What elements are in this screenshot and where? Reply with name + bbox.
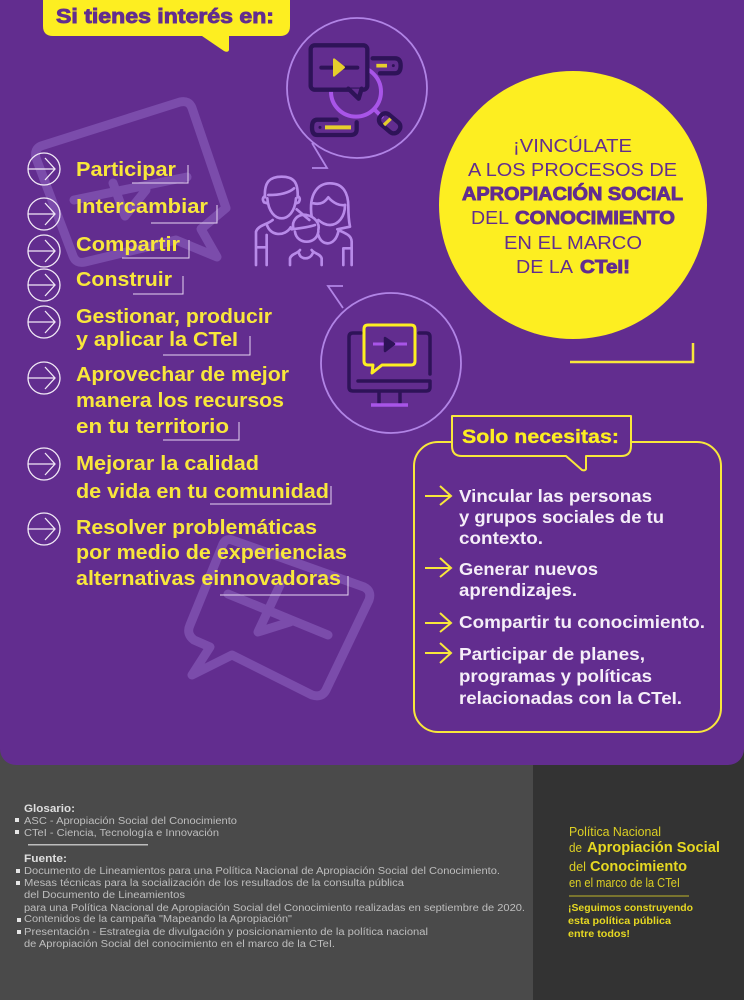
item: Vincular	[425, 486, 664, 548]
list item: Resolver problemáticas: Resolver problemáticas	[76, 516, 317, 539]
sources: Presentación - Estrategia de divulgación y posicionamiento de la política nacional	[24, 927, 428, 938]
closing message	[568, 902, 693, 940]
sources: Contenidos de la campaña "Mapeando la Apropiación"	[24, 914, 292, 925]
policy title	[569, 825, 720, 896]
list item: Resolver problemáticas: por medio de experiencias	[76, 541, 347, 564]
speech bubble heading: Si tienes interés en	[43, 0, 290, 52]
item: Generar: Generar nuevos	[459, 559, 598, 579]
closing message: entre todos!	[568, 928, 630, 940]
item: Participar	[425, 643, 682, 708]
tag: Solo necesitas heading	[452, 416, 631, 470]
item: Vincular: Vincular las personas	[459, 486, 652, 506]
item: Participar: Participar de planes,	[459, 644, 645, 664]
policy title: Apropiación Social	[587, 839, 720, 856]
item: Vincular: y grupos sociales de tu	[459, 507, 664, 527]
item: Participar: relacionadas con la CTeI.	[459, 688, 682, 708]
purple main panel	[0, 0, 744, 765]
icon: search circle with video bubble	[287, 18, 427, 168]
watermark: chat bubble bottom	[189, 540, 370, 696]
list item: Gestionar, producir y aplicar la CTeI: y aplicar la CTeI	[76, 328, 238, 351]
yellow circle callout: DE LA	[516, 256, 574, 277]
tag: Solo necesitas heading: Solo necesitas:	[462, 427, 619, 448]
list item: Construir: Construir	[76, 268, 172, 291]
yellow circle callout: CTeI!	[580, 256, 630, 277]
list item: Intercambiar	[28, 195, 217, 230]
item: Participar: programas y políticas	[459, 666, 652, 686]
list item: Compartir: Compartir	[76, 233, 180, 256]
policy title: en el marco de la CTeI	[569, 876, 680, 890]
glossary	[15, 803, 237, 846]
yellow circle callout	[439, 71, 707, 362]
yellow circle callout: A LOS PROCESOS DE	[468, 159, 677, 180]
list item: Compartir	[28, 233, 189, 267]
watermark: chat bubble top left	[36, 102, 226, 262]
list item: Intercambiar: Intercambiar	[76, 195, 208, 218]
sources	[16, 853, 525, 950]
yellow circle callout: ¡VINCÚLATE	[513, 135, 632, 156]
policy title: del	[569, 860, 586, 874]
item: Generar: aprendizajes.	[459, 580, 577, 600]
closing message: ¡Seguimos construyendo	[568, 902, 693, 914]
sources: del Documento de Lineamientos	[24, 890, 185, 901]
list item: Mejorar la calidad de vida	[28, 448, 331, 504]
item: Generar	[425, 558, 598, 600]
footer right background	[533, 740, 744, 1000]
item: Compartir: Compartir tu conocimiento.	[459, 612, 705, 632]
sources: para una Política Nacional de Apropiación Social del Conocimiento realizadas en septiembre de 2020.	[24, 903, 525, 914]
list item: Mejorar la calidad de vida: Mejorar la calidad	[76, 452, 259, 475]
item: Vincular: contexto.	[459, 528, 543, 548]
icon: monitor circle	[321, 286, 461, 433]
list item: Participar: Participar	[76, 158, 176, 181]
speech bubble heading: Si tienes interés en: Si tienes interés en:	[56, 5, 274, 28]
glossary: ASC - Apropiación Social del Conocimiento	[24, 816, 237, 827]
policy title: de	[569, 841, 582, 855]
closing message: esta política pública	[568, 915, 671, 927]
glossary: CTeI - Ciencia, Tecnología e Innovación	[24, 828, 219, 839]
list item: Aprovechar los recursos: Aprovechar de mejor	[76, 363, 289, 386]
footer left background	[0, 740, 533, 1000]
list item: Construir	[28, 268, 183, 301]
list item: Participar	[28, 153, 188, 185]
list item: Aprovechar los recursos: en tu territorio	[76, 415, 229, 438]
sources: Mesas técnicas para la socialización de los resultados de la consulta pública	[24, 878, 404, 889]
list item: Aprovechar los recursos	[28, 362, 289, 440]
icon: family	[256, 177, 352, 265]
list item: Resolver problemáticas	[28, 513, 348, 595]
policy title: Conocimiento	[590, 858, 687, 875]
policy title: Política Nacional	[569, 825, 661, 839]
list item: Resolver problemáticas: alternativas einnovadoras	[76, 567, 341, 590]
list item: Gestionar, producir y aplicar la CTeI: Gestionar, producir	[76, 305, 272, 328]
panel: Solo necesitas	[414, 416, 721, 732]
yellow circle callout: CONOCIMIENTO	[515, 207, 675, 228]
yellow circle callout: APROPIACIÓN SOCIAL	[462, 183, 683, 204]
yellow circle callout: EN EL MARCO	[504, 232, 642, 253]
sources: de Apropiación Social del conocimiento en el marco de la CTeI.	[24, 939, 335, 950]
list item: Aprovechar los recursos: manera los recursos	[76, 389, 284, 412]
list item: Mejorar la calidad de vida: de vida en tu comunidad	[76, 480, 329, 503]
list item: Gestionar, producir y aplicar la CTeI	[28, 305, 272, 355]
yellow circle callout: DEL	[471, 207, 509, 228]
sources: Fuente:	[24, 853, 67, 865]
glossary: Glosario:	[24, 803, 75, 815]
sources: Documento de Lineamientos para una Política Nacional de Apropiación Social del Conocimiento.	[24, 866, 500, 877]
